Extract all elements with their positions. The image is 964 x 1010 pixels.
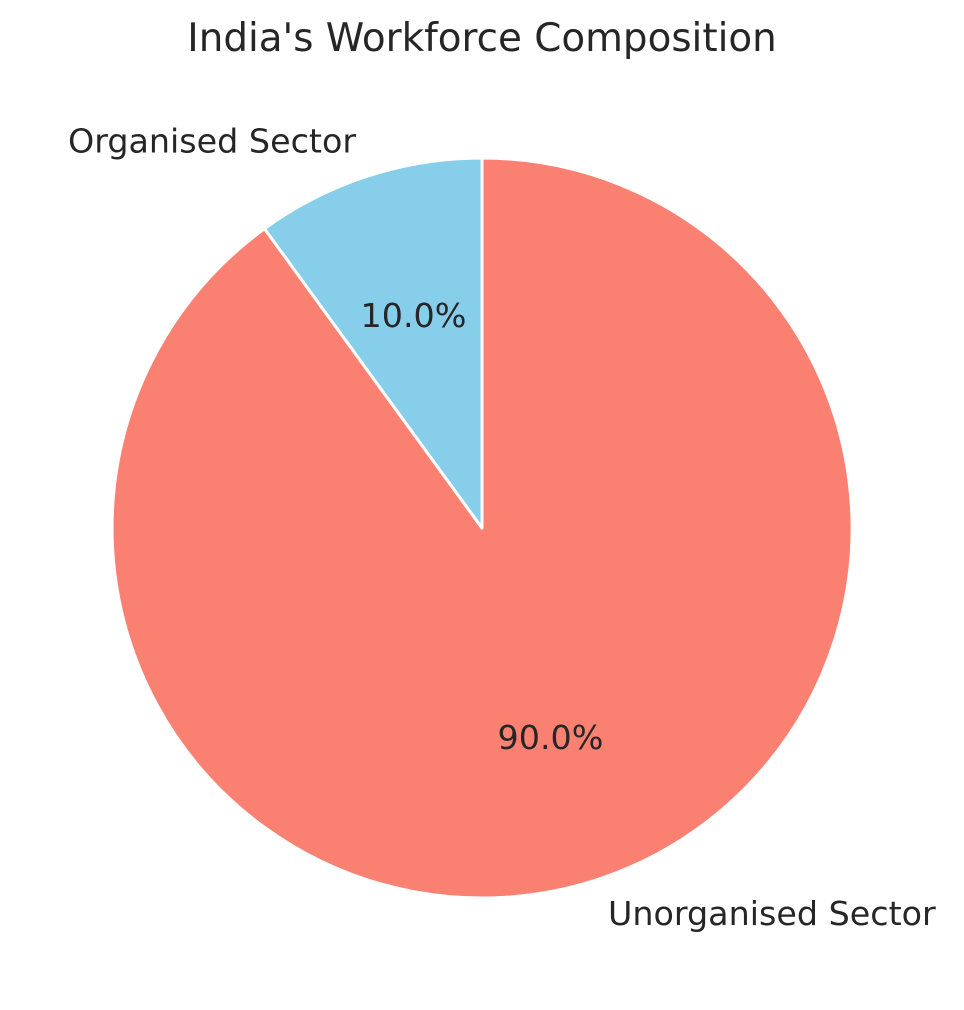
label: unorganised sector: Unorganised Sector [608, 894, 936, 933]
label: organised sector: Organised Sector [68, 122, 356, 160]
slice: organised sector 10% [264, 158, 482, 528]
value label: 10.0%: 10.0% [361, 296, 466, 335]
pie chart [112, 158, 852, 898]
title: India's Workforce Composition [187, 16, 777, 61]
value label: 90.0%: 90.0% [498, 718, 603, 757]
slice: unorganised sector 90% [112, 158, 852, 898]
